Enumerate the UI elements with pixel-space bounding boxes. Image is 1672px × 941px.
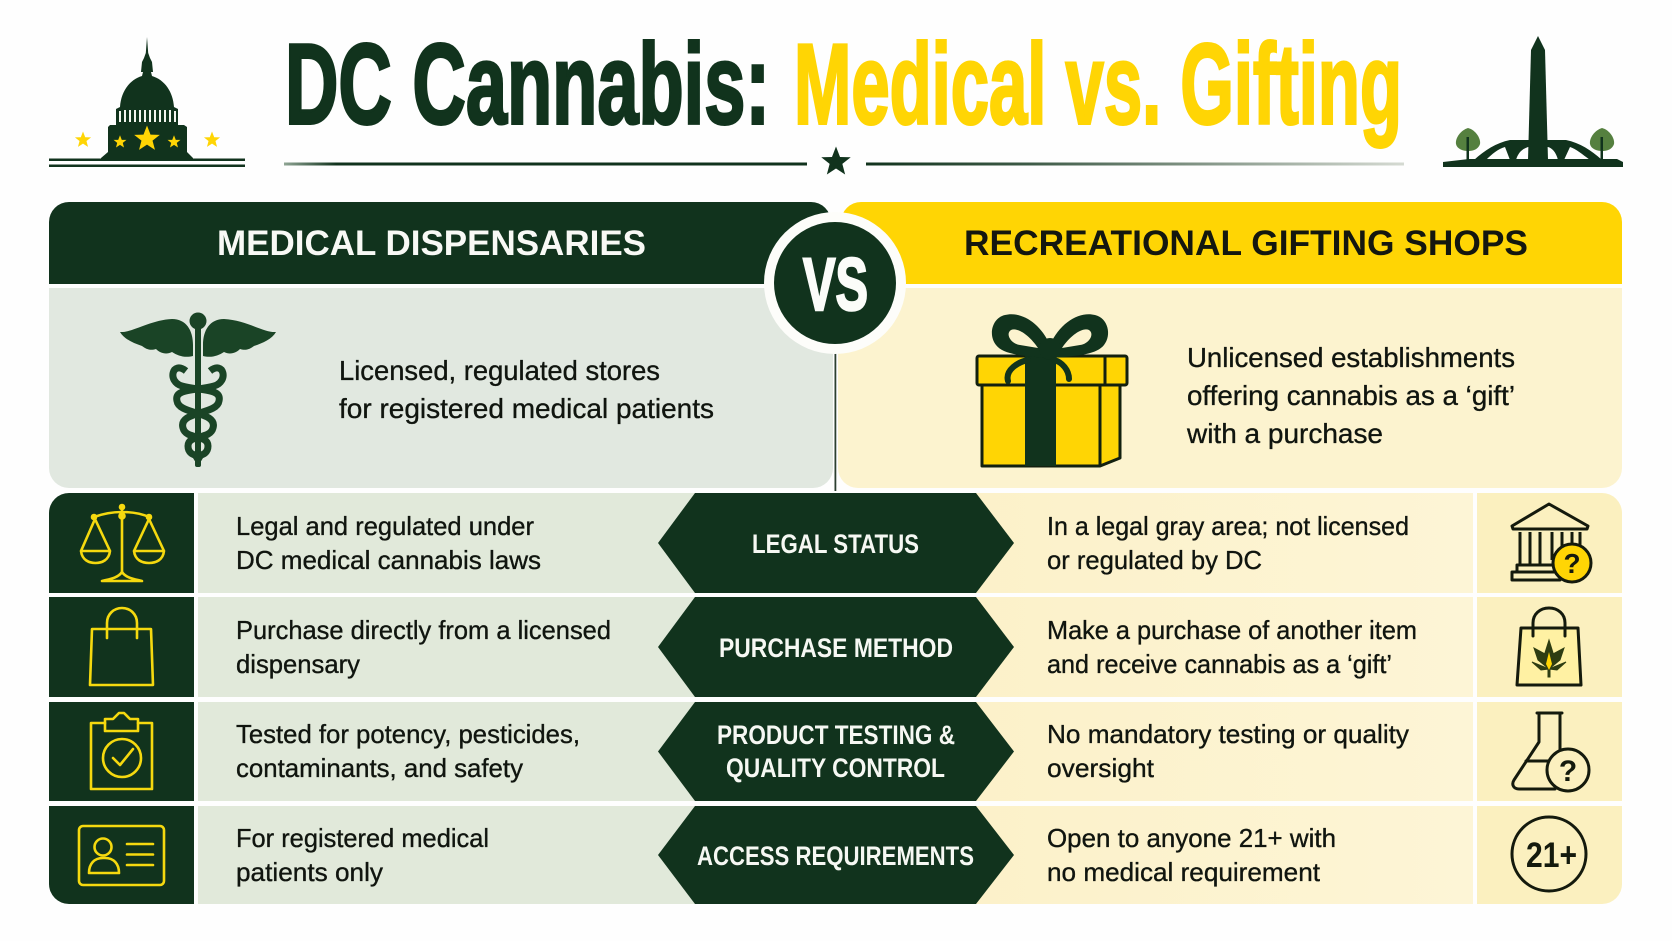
right cell: product testing [836,702,1473,801]
icon: gift box [977,314,1127,466]
comparison row: legal status [49,493,1622,593]
hexagon label: access requirements [658,806,1014,904]
left cell: access requirements [198,806,836,904]
heading: medical dispensaries [49,202,831,284]
hexagon label: access requirements: ACCESS REQUIREMENTS [697,841,974,871]
left cell: legal status: Legal and regulated under [236,511,534,541]
right icon cell [1477,493,1622,593]
icon: bank with question mark: ? [1563,548,1581,579]
icon: bag with cannabis leaf [1517,608,1581,685]
icon: washington monument [1443,36,1623,167]
description card: gifting: Unlicensed establishments [1187,342,1515,373]
right cell: access requirements: Open to anyone 21+ with [1047,823,1336,853]
icon: id card [79,826,164,885]
left cell: product testing: contaminants, and safety [236,753,523,783]
description card: gifting [838,288,1622,488]
icon: flask with question mark: ? [1559,755,1577,788]
comparison row: product testing [49,702,1622,801]
right cell: legal status [836,493,1473,593]
icon: bank with question mark [1512,504,1591,582]
left cell: legal status: DC medical cannabis laws [236,545,541,575]
panel: recreational gifting shops [838,202,1622,488]
left cell: product testing: Tested for potency, pesticides, [236,719,580,749]
left cell: product testing [198,702,836,801]
vs divider line [834,350,836,491]
left cell: legal status [198,493,836,593]
right cell: access requirements: no medical requirement [1047,857,1321,887]
heading: recreational gifting shops [841,202,1622,284]
right cell: access requirements [836,806,1473,904]
hexagon label: legal status: LEGAL STATUS [752,529,919,559]
left icon cell [49,493,194,593]
vs badge: VS [803,243,868,326]
description card: gifting: offering cannabis as a ‘gift’ [1187,380,1515,411]
icon: 21 plus badge: 21+ [1526,836,1577,875]
left cell: access requirements: patients only [236,857,383,887]
left cell: purchase method [198,597,836,697]
right cell: product testing: No mandatory testing or quality [1047,719,1409,749]
left cell: access requirements: For registered medical [236,823,489,853]
hexagon label: legal status [658,493,1014,593]
right cell: legal status: In a legal gray area; not licensed [1047,511,1409,541]
left icon cell [49,597,194,697]
vs badge [764,212,906,354]
hexagon label: purchase method: PURCHASE METHOD [719,633,953,663]
description card: gifting: with a purchase [1186,418,1383,449]
left cell: purchase method: dispensary [236,649,360,679]
icon: scales of justice [81,505,164,581]
hexagon label: product testing: QUALITY CONTROL [726,753,945,783]
comparison row: purchase method [49,597,1622,697]
title rule with star [284,146,1404,175]
title [285,22,1402,148]
heading: medical dispensaries: MEDICAL DISPENSARIES [217,224,646,263]
right cell: purchase method: Make a purchase of another item [1047,615,1417,645]
left cell: purchase method: Purchase directly from a licensed [236,615,611,645]
icon: shopping bag [90,608,153,685]
comparison row: access requirements [49,806,1622,904]
heading: recreational gifting shops: RECREATIONAL GIFTING SHOPS [964,224,1528,263]
description card: medical: for registered medical patients [339,393,714,424]
right icon cell [1477,806,1622,904]
right cell: legal status: or regulated by DC [1047,545,1262,575]
hexagon label: purchase method [658,597,1014,697]
left icon cell [49,702,194,801]
left icon cell [49,806,194,904]
right icon cell [1477,597,1622,697]
icon: flask with question mark [1513,713,1589,791]
description card: medical [49,288,833,488]
icon: caduceus [120,312,276,467]
title: DC Cannabis: [285,22,770,148]
right cell: product testing: oversight [1047,753,1155,783]
right icon cell [1477,702,1622,801]
description card: medical: Licensed, regulated stores [339,355,660,386]
panel: medical dispensaries [49,202,833,488]
icon: capitol building [49,37,245,167]
icon: 21 plus badge [1512,817,1586,891]
right cell: purchase method [836,597,1473,697]
hexagon label: product testing: PRODUCT TESTING & [717,720,955,750]
hexagon label: product testing [658,702,1014,801]
right cell: purchase method: and receive cannabis as a ‘gift’ [1047,649,1392,679]
icon: clipboard check [91,713,152,789]
